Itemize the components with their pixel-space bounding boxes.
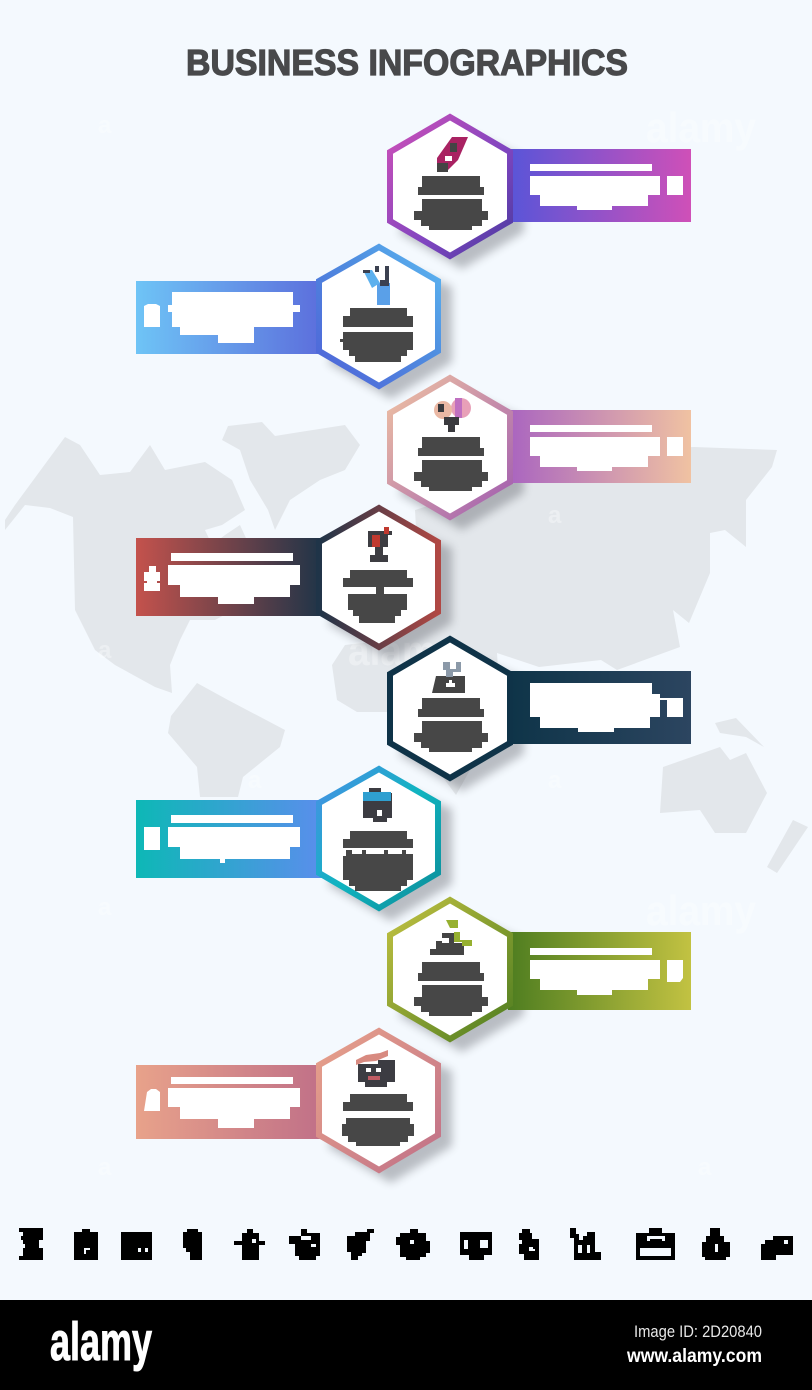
ribbon 6 text blocks xyxy=(144,815,300,863)
ribbon 8 xyxy=(136,1065,322,1139)
hexagon 6 xyxy=(319,769,438,908)
hexagon 7 text blocks xyxy=(414,962,488,1016)
hexagon 2 xyxy=(319,247,438,386)
icon: monitor xyxy=(289,1229,320,1260)
hexagon 4 text blocks xyxy=(343,570,413,623)
icon: document xyxy=(74,1229,98,1260)
hexagon 6 text blocks xyxy=(343,831,413,891)
watermark xyxy=(98,104,757,1181)
icon 3: balloons xyxy=(434,398,471,432)
hexagon 8 text blocks xyxy=(342,1094,414,1146)
ribbon 1 xyxy=(508,149,691,222)
step 4 xyxy=(136,508,452,660)
icon: gear xyxy=(396,1229,430,1260)
website: www.alamy.com xyxy=(626,1346,762,1367)
icon: briefcase xyxy=(636,1228,675,1260)
step 8 xyxy=(136,1031,452,1183)
ribbon 4 xyxy=(136,538,322,616)
ribbon 2 text blocks xyxy=(144,292,300,343)
icon: lamp xyxy=(234,1229,265,1260)
title: BUSINESS INFOGRAPHICS xyxy=(186,42,628,83)
step 1 xyxy=(390,117,691,269)
icon 1: tag xyxy=(437,137,468,172)
icon row xyxy=(19,1228,793,1260)
icon: hourglass xyxy=(19,1228,43,1260)
footer bar xyxy=(0,1300,812,1390)
icon 7: hand and leaf xyxy=(430,920,472,955)
ribbon 5 xyxy=(508,671,691,744)
hexagon 5 xyxy=(390,639,510,778)
alamy logo: alamy xyxy=(50,1312,152,1372)
icon: head xyxy=(183,1229,202,1260)
ribbon 1 text blocks xyxy=(530,164,683,210)
ribbon 3 text blocks xyxy=(530,425,683,471)
icon 5: tool box xyxy=(432,662,465,693)
icon: tool xyxy=(347,1229,374,1260)
icon: wallet xyxy=(761,1236,793,1260)
image id: Image ID: 2D20840 xyxy=(634,1322,762,1341)
watermark: alamy xyxy=(646,887,757,934)
ribbon 7 text blocks xyxy=(530,948,683,995)
watermark: a xyxy=(98,1154,112,1181)
hexagon 3 text blocks xyxy=(414,437,488,491)
hexagon 5 text blocks xyxy=(414,698,488,752)
icon: screen xyxy=(460,1232,492,1260)
hexagon 8 xyxy=(319,1031,438,1170)
watermark: a xyxy=(98,894,112,921)
watermark: a xyxy=(98,112,112,139)
icon 8: camera xyxy=(356,1050,395,1087)
hexagon 3 xyxy=(390,378,510,517)
world map xyxy=(5,422,808,873)
icon 2: arm xyxy=(363,266,390,305)
ribbon 5 text blocks xyxy=(530,683,683,732)
watermark: a xyxy=(548,502,562,529)
icon: chart xyxy=(570,1228,601,1260)
hexagon 4 xyxy=(319,508,438,647)
ribbon 3 xyxy=(508,410,691,483)
step 3 xyxy=(390,378,691,530)
watermark: alamy xyxy=(646,104,757,151)
watermark: a xyxy=(98,637,112,664)
hexagon 1 xyxy=(390,117,510,256)
icon 4: person with flag xyxy=(368,527,392,562)
icon: box xyxy=(121,1232,152,1260)
watermark: alamy xyxy=(348,627,459,674)
step 6 xyxy=(136,769,452,921)
ribbon 2 xyxy=(136,281,322,354)
step 2 xyxy=(136,247,452,399)
watermark: a xyxy=(698,1154,712,1181)
ribbon 6 xyxy=(136,800,322,878)
icon: bottle xyxy=(519,1229,539,1260)
ribbon 8 text blocks xyxy=(144,1077,300,1128)
hexagon 1 text blocks xyxy=(414,176,488,230)
ribbon 4 text blocks xyxy=(144,553,300,604)
ribbon 7 xyxy=(508,932,691,1010)
step 5 xyxy=(390,639,691,791)
watermark: a xyxy=(548,767,562,794)
step 7 xyxy=(390,900,691,1052)
hexagon 7 xyxy=(390,900,510,1039)
hexagon 2 text blocks xyxy=(340,308,413,362)
watermark: a xyxy=(248,767,262,794)
icon: bottle large xyxy=(702,1228,730,1260)
icon 6: device xyxy=(363,788,392,822)
